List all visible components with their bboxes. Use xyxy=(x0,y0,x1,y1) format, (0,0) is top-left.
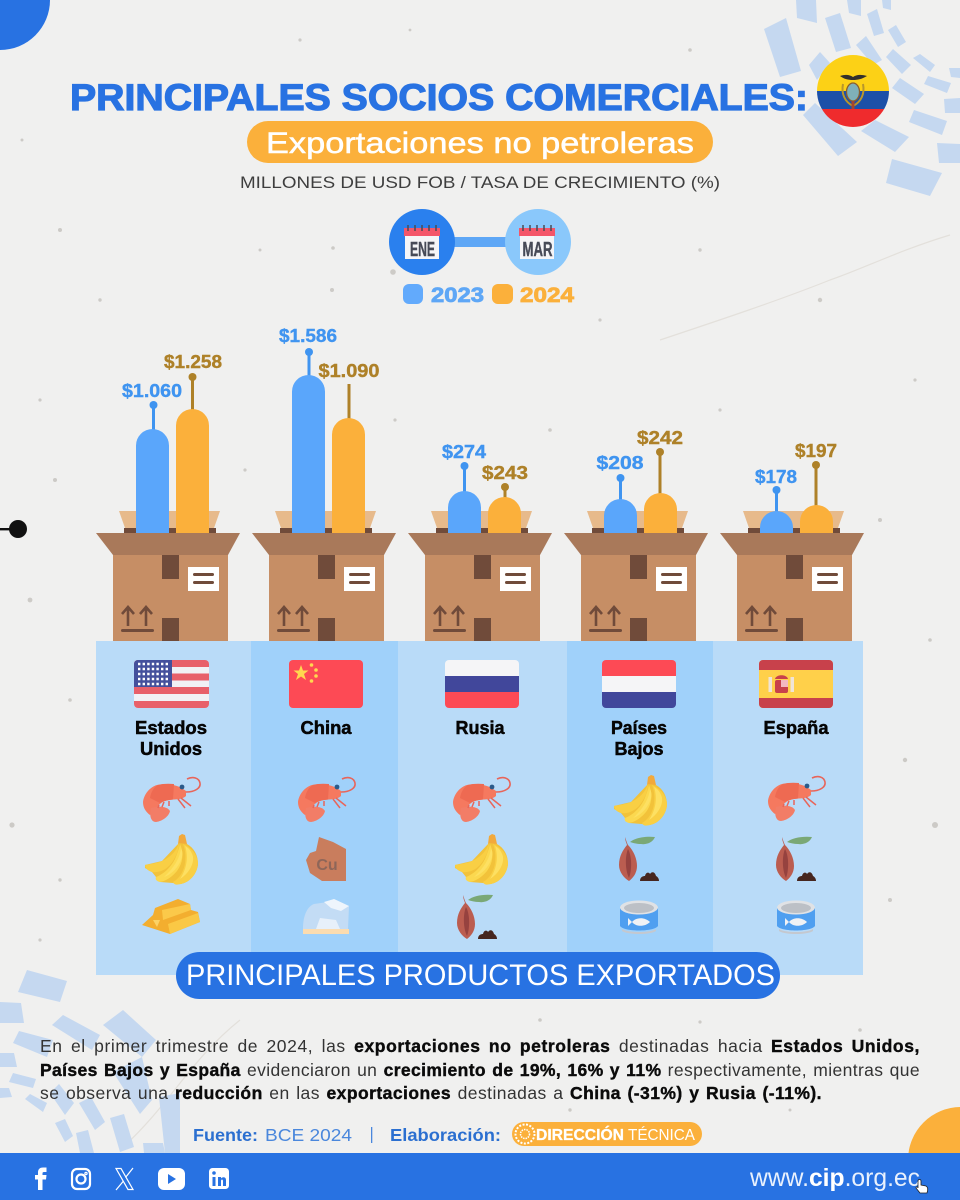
box chart: Estados Unidos xyxy=(96,352,240,641)
subtitle pill: Exportaciones no petroleras xyxy=(266,127,694,160)
products: China xyxy=(298,778,355,934)
icon: hand cursor xyxy=(916,1180,928,1193)
heading: products pill xyxy=(176,952,780,999)
icon: X xyxy=(116,1168,133,1190)
title: PRINCIPALES SOCIOS COMERCIALES: xyxy=(70,76,808,118)
icon: shrimp xyxy=(453,778,510,822)
icon: ice block xyxy=(303,899,349,934)
box chart: Estados Unidos: $1.258 xyxy=(164,352,222,372)
paragraph: summary xyxy=(40,1036,920,1103)
icon: facebook xyxy=(35,1168,46,1190)
source line: BCE 2024 xyxy=(265,1125,352,1145)
calendar: MAR: MAR xyxy=(522,239,553,261)
paragraph: summary: En el primer trimestre de 2024, las exportaciones no petroleras destinadas hacia Estados Unidos, xyxy=(40,1036,920,1056)
footer bar xyxy=(0,1153,960,1200)
badge: Dirección Técnica: TÉCNICA xyxy=(628,1125,695,1144)
flag: China xyxy=(289,660,363,708)
units caption: MILLONES DE USD FOB / TASA DE CRECIMIENTO (%) xyxy=(240,173,720,192)
icon: gold bars xyxy=(142,899,200,934)
icon: shrimp xyxy=(298,778,355,822)
paragraph: summary: Países Bajos y España evidenciaron un crecimiento de 19%, 16% y 11% respectivamente, mientras que xyxy=(40,1060,920,1080)
period indicator xyxy=(389,209,571,275)
country name: Países Bajos: Bajos xyxy=(614,739,664,759)
icon: copper ore xyxy=(306,837,346,881)
flag: Estados Unidos xyxy=(134,660,209,708)
country name: Estados Unidos xyxy=(135,718,207,759)
box chart: China: $1.090 xyxy=(318,361,380,381)
country name: Rusia: Rusia xyxy=(456,718,505,738)
icon: cocoa xyxy=(619,837,659,881)
corner circle: top left xyxy=(0,0,50,50)
timeline marker: left edge xyxy=(0,520,27,538)
paragraph: summary: se observa una reducción en las exportaciones destinadas a China (-31%) y Rusia (-11%). xyxy=(40,1083,822,1103)
icon: shrimp xyxy=(768,777,825,821)
box chart: Países Bajos: $242 xyxy=(637,428,683,448)
icon: tuna can xyxy=(777,900,815,934)
icon: linkedin xyxy=(209,1168,229,1189)
calendar: MAR xyxy=(505,209,571,275)
calendar: ENE xyxy=(389,209,455,275)
icon: cocoa xyxy=(457,895,497,939)
box chart: Estados Unidos: $1.060 xyxy=(122,381,182,401)
flag: España xyxy=(759,660,833,708)
legend: 2023: 2023 xyxy=(431,284,484,307)
flag: Países Bajos xyxy=(602,660,676,708)
country name: Estados Unidos: Unidos xyxy=(140,739,202,759)
decorative arcs: bottom left xyxy=(0,970,180,1153)
icon: banana xyxy=(455,834,508,885)
legend: 2024: 2024 xyxy=(520,284,574,307)
legend: 2024 xyxy=(492,284,574,307)
badge: Dirección Técnica: DIRECCIÓN xyxy=(536,1125,624,1144)
box chart: España: $197 xyxy=(795,441,837,461)
products: Países Bajos xyxy=(614,775,667,934)
box chart: Países Bajos: $208 xyxy=(596,453,644,473)
corner circle: bottom right xyxy=(908,1107,960,1200)
country name: Países Bajos xyxy=(611,718,667,759)
country name: China: China xyxy=(300,718,352,738)
background crack lines xyxy=(120,235,950,1150)
box chart: España xyxy=(720,441,864,641)
icon: banana xyxy=(614,775,667,826)
source line: Fuente: xyxy=(193,1125,258,1145)
source line xyxy=(193,1122,702,1146)
icon: banana xyxy=(145,834,198,885)
country name: Estados Unidos: Estados xyxy=(135,718,207,738)
source line: Elaboración: xyxy=(390,1125,501,1145)
icon: youtube xyxy=(158,1168,185,1190)
icon: copper ore: Cu xyxy=(316,857,338,874)
country name: España: España xyxy=(764,718,830,738)
calendar: ENE: ENE xyxy=(410,239,435,261)
icon: shrimp xyxy=(143,778,200,822)
decorative arcs: top right xyxy=(764,0,960,196)
badge: Dirección Técnica xyxy=(512,1122,702,1146)
products: España xyxy=(768,777,825,934)
icon: Ecuador flag xyxy=(817,55,889,127)
subtitle pill xyxy=(247,121,713,163)
icon: cocoa xyxy=(776,837,816,881)
products: Rusia xyxy=(453,778,510,939)
website: www.cip.org.ec xyxy=(749,1164,920,1192)
icon: tuna can xyxy=(620,900,658,934)
heading: products pill: PRINCIPALES PRODUCTOS EXPORTADOS xyxy=(186,959,775,992)
panel: product columns xyxy=(96,641,863,975)
products: Estados Unidos xyxy=(142,778,200,934)
icon: instagram xyxy=(72,1169,90,1189)
legend xyxy=(403,284,574,307)
box chart: China: $1.586 xyxy=(279,326,337,346)
box chart: China xyxy=(252,326,396,641)
box chart: Países Bajos xyxy=(564,428,708,641)
country name: Países Bajos: Países xyxy=(611,718,667,738)
box chart: Rusia xyxy=(408,442,552,641)
box chart: Rusia: $274 xyxy=(442,442,486,462)
flag: Rusia xyxy=(445,660,519,708)
box chart: España: $178 xyxy=(755,467,797,487)
box chart: Rusia: $243 xyxy=(482,463,528,483)
legend: 2023 xyxy=(403,284,484,307)
